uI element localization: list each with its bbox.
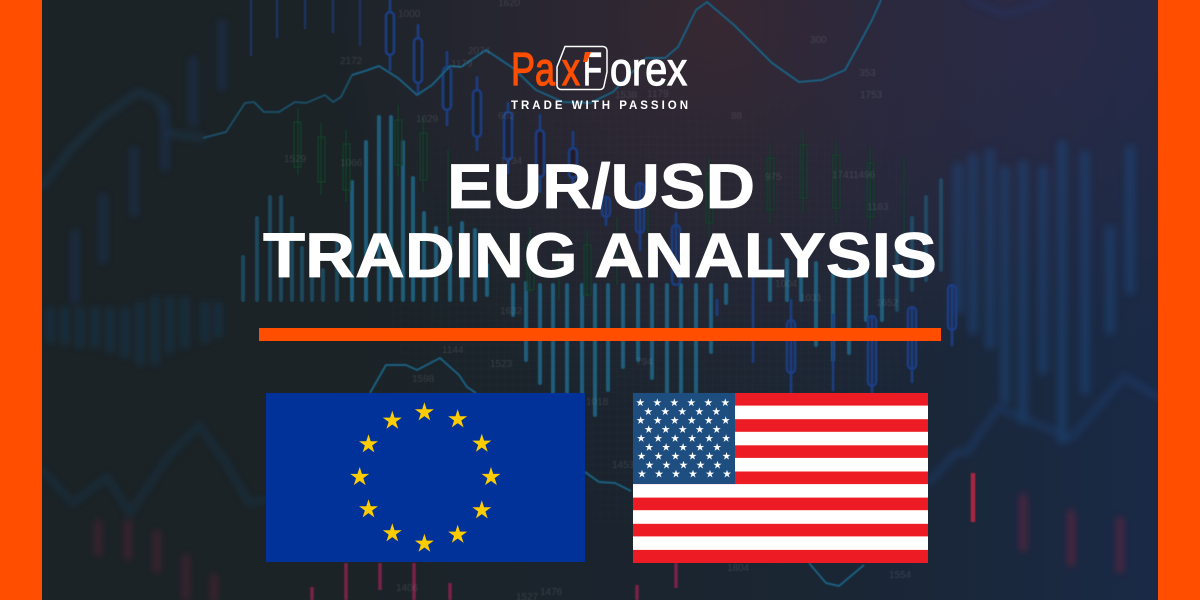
icon: US flag [633, 393, 928, 563]
logo wordmark: F [583, 43, 602, 95]
teal volume bars [243, 117, 941, 415]
faint chart numbers: 2074 [468, 46, 491, 57]
logo box [557, 46, 607, 90]
faint chart numbers: 1179 [451, 59, 473, 70]
faint chart numbers: 1496 [853, 170, 876, 181]
title [263, 152, 937, 291]
faint chart numbers: 1000 [398, 9, 421, 20]
faint chart numbers: 1406 [396, 583, 419, 594]
logo wordmark: Pa [511, 43, 555, 95]
faint chart numbers: 1753 [860, 90, 883, 101]
faint chart numbers: 2172 [340, 56, 363, 67]
faint chart numbers: 353 [859, 68, 876, 79]
faint chart numbers: 1741 [832, 170, 855, 181]
faint chart numbers: 1476 [540, 587, 563, 598]
logo wordmark [511, 43, 687, 95]
faint chart numbers: 1066 [340, 158, 363, 169]
faint chart numbers: 1453 [612, 460, 635, 471]
faint chart numbers: 1004 [775, 279, 798, 290]
faint chart numbers: 1179 [647, 89, 669, 100]
teal price lines [203, 0, 881, 586]
faint chart numbers: 1554 [889, 570, 912, 581]
faint chart numbers: 1632 [500, 306, 523, 317]
faint chart numbers: 1523 [490, 359, 513, 370]
faint chart numbers: 794 [636, 357, 653, 368]
faint chart numbers: 300 [810, 35, 827, 46]
icon: EU flag [266, 393, 585, 562]
faint chart numbers: 1538 [615, 90, 638, 101]
faint chart numbers: 1144 [442, 345, 464, 356]
faint chart numbers [284, 0, 912, 600]
right orange band [1158, 0, 1200, 600]
faint chart numbers: 1183 [867, 202, 889, 213]
faint chart numbers: 662 [498, 111, 515, 122]
faint chart numbers: 1234 [500, 156, 523, 167]
logo wordmark: x [562, 43, 580, 95]
logo tick [583, 52, 591, 62]
logo: PaxForex [511, 43, 688, 112]
faint chart numbers: 1652 [876, 298, 899, 309]
blue candlesticks [251, 0, 956, 393]
faint chart numbers: 1598 [412, 374, 435, 385]
logo wordmark: orex [610, 43, 687, 95]
faint chart numbers: 1529 [284, 154, 307, 165]
title: EUR/USD [447, 152, 755, 222]
title: TRADING ANALYSIS [263, 221, 937, 291]
green candlesticks [294, 105, 904, 300]
orange divider bar [259, 328, 941, 341]
faint chart numbers: 1018 [586, 397, 609, 408]
faint chart numbers: 1629 [416, 114, 439, 125]
tagline: TRADE WITH PASSION [511, 100, 688, 112]
faint chart numbers: 975 [765, 172, 782, 183]
faint chart numbers: 1804 [727, 563, 750, 574]
left orange band [0, 0, 42, 600]
faint chart numbers: 1031 [800, 293, 823, 304]
red candles [312, 473, 973, 600]
faint chart numbers: 88 [731, 111, 743, 122]
